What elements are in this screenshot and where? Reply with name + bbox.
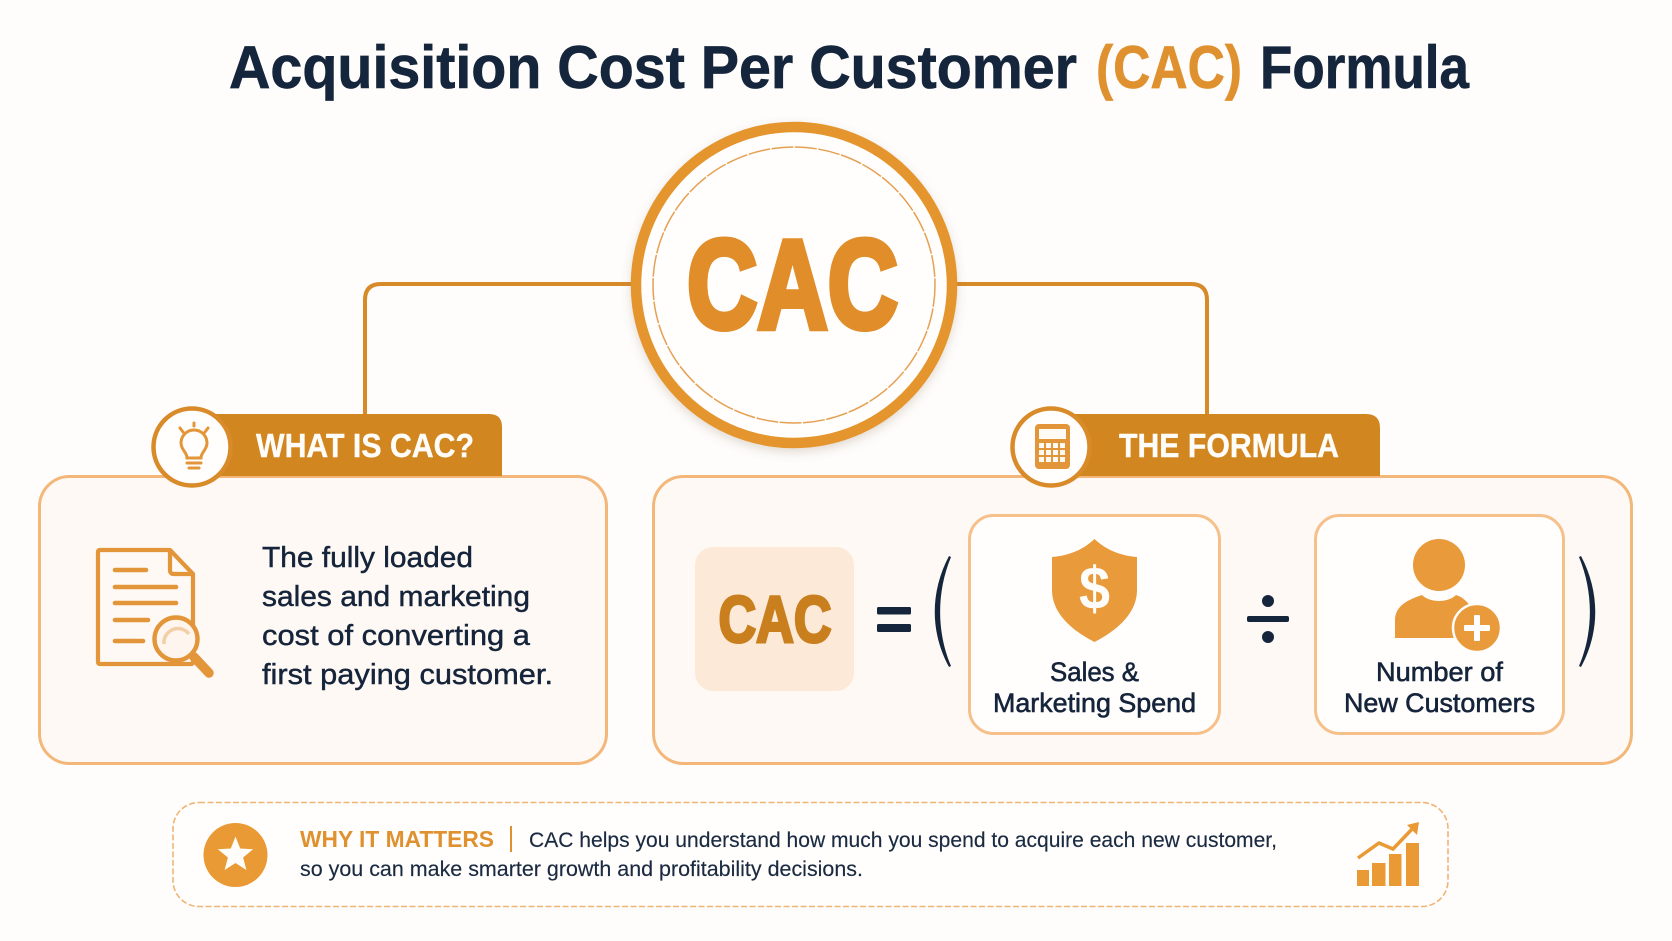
- division sign: [1247, 595, 1289, 643]
- heading tab: what is CAC: WHAT IS CAC?: [256, 427, 474, 464]
- label: Number of: [1376, 657, 1503, 687]
- card: number of new customers: [1316, 516, 1564, 734]
- title: Acquisition Cost Per Customer: [229, 34, 1077, 101]
- title: Formula: [1260, 34, 1470, 101]
- central CAC badge: [636, 127, 952, 443]
- text: why it matters body: [300, 829, 1277, 881]
- formula term: CAC: [695, 547, 854, 691]
- text: definition: [262, 542, 553, 691]
- title: (CAC): [1096, 34, 1242, 101]
- heading tab: the formula: [1012, 408, 1380, 486]
- label: New Customers: [1344, 688, 1535, 718]
- icon: shield with dollar sign: $: [1079, 555, 1110, 622]
- icon: growth chart: [1357, 822, 1419, 886]
- icon: person with plus: [1395, 539, 1501, 652]
- text: definition: first paying customer.: [262, 659, 553, 691]
- left parenthesis: [935, 556, 951, 667]
- text: why it matters body: CAC helps you understand how much you spend to acquire each new customer,: [529, 829, 1277, 852]
- panel: what is CAC: [40, 476, 606, 764]
- label: [993, 657, 1196, 718]
- icon: lightbulb: [180, 423, 208, 468]
- heading tab: the formula: THE FORMULA: [1119, 427, 1339, 464]
- card: sales and marketing spend: [970, 516, 1220, 734]
- connector lines: [365, 284, 1207, 416]
- formula term: CAC: CAC: [718, 582, 832, 656]
- label: Marketing Spend: [993, 688, 1196, 718]
- callout: why it matters: [173, 802, 1448, 906]
- label: why it matters: WHY IT MATTERS: [300, 826, 494, 852]
- panel: the formula: [654, 476, 1632, 764]
- text: why it matters body: so you can make smarter growth and profitability decisions.: [300, 858, 863, 881]
- icon: document with magnifier: [98, 550, 209, 673]
- central CAC badge: CAC: [687, 214, 898, 355]
- label: [1344, 657, 1535, 718]
- text: definition: The fully loaded: [262, 542, 473, 574]
- icon: star badge: [204, 823, 268, 887]
- icon: shield with dollar sign: [1052, 539, 1137, 642]
- label: Sales &: [1050, 657, 1139, 687]
- right parenthesis: [1579, 556, 1595, 667]
- equals sign: [877, 607, 911, 632]
- text: definition: sales and marketing: [262, 581, 530, 613]
- heading tab: what is CAC: [154, 408, 502, 486]
- icon: calculator: [1035, 424, 1070, 469]
- text: definition: cost of converting a: [262, 620, 531, 652]
